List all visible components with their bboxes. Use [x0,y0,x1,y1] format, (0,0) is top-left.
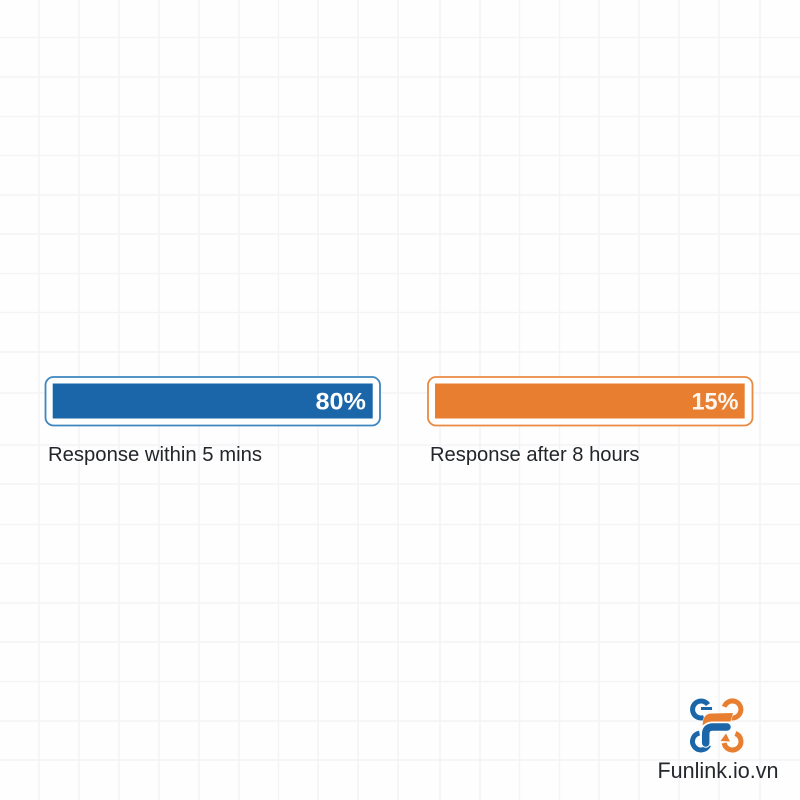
value: 80%: 80% [316,389,366,416]
panel: response after 8 hours [428,377,752,466]
logo wordmark: Funlink.io.vn [658,758,778,783]
orange bar fill [435,384,745,418]
panel: response within 5 mins [46,377,380,466]
blue bar outline [46,377,380,426]
logo: Funlink [658,701,778,783]
label: response after 8 hours: Response after 8 hours [430,443,640,466]
value: 15%: 15% [692,389,738,416]
orange bar outline [428,377,752,426]
blue bar fill [53,384,373,418]
logo icon [693,701,741,750]
label: response within 5 mins: Response within 5 mins [48,443,262,466]
